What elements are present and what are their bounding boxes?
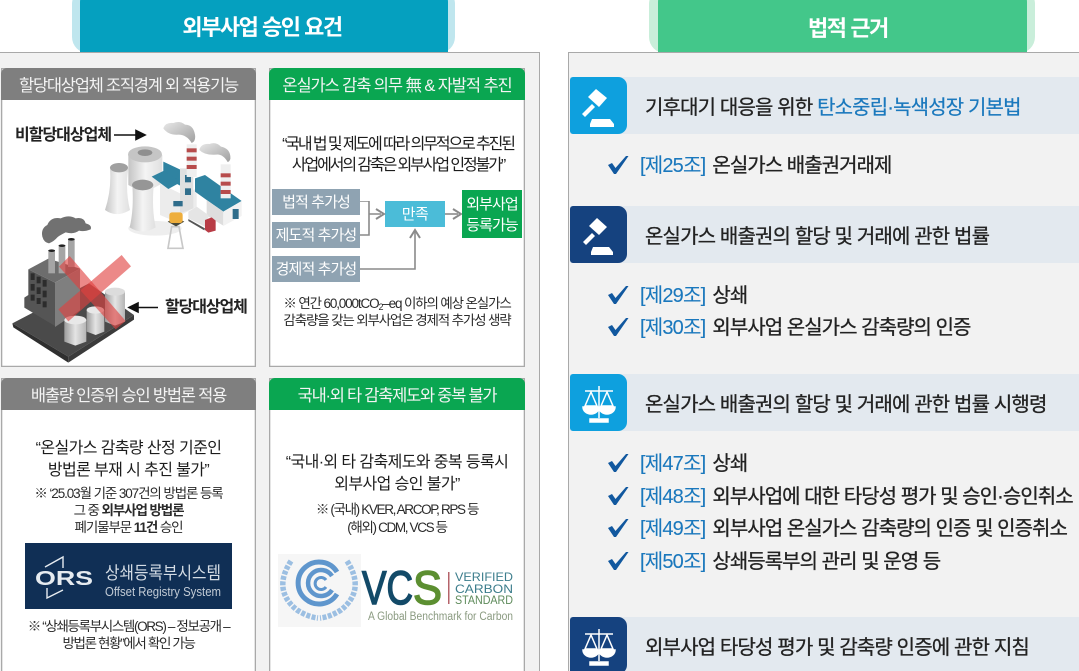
article 25: [제25조] 온실가스 배출권거래제 xyxy=(640,155,891,177)
quote xyxy=(282,136,514,174)
footnote: 감축량을 갖는 외부사업은 경제적 추가성 생략 xyxy=(283,313,511,328)
note: ※ (국내) KVER, ARCOP, RPS 등 xyxy=(316,502,478,517)
quote: “국내 법 및 제도에 따라 의무적으로 추진된 xyxy=(282,136,514,153)
flow box: 외부사업 등록가능: 등록가능 xyxy=(466,217,518,234)
article 29: [제29조] 상쇄 xyxy=(640,285,747,307)
card heading: 온실가스 감축 의무 無 & 자발적 추진 xyxy=(282,77,512,95)
building xyxy=(160,183,197,220)
card: 온실가스 감축 의무 無 & 자발적 추진 xyxy=(269,68,525,367)
footnote: ※ 연간 60,000tCO2–eq 이하의 예상 온실가스 xyxy=(283,296,511,312)
card heading xyxy=(1,378,256,410)
tab title: 법적 근거 xyxy=(808,16,888,41)
quote: “온실가스 감축량 산정 기준인 xyxy=(36,440,221,457)
law title: 외부사업 타당성 평가 및 감축량 인증에 관한 지침 xyxy=(645,636,1029,658)
quote: 사업에서의 감축은 외부사업 인정불가” xyxy=(292,157,504,174)
law title: 기후대기 대응을 위한 탄소중립·녹색성장 기본법 xyxy=(645,96,1021,118)
card heading: 할당대상업체 조직경계 외 적용기능 xyxy=(19,77,238,95)
note: 상쇄등록부시스템: 방법론 현황”에서 확인 가능 xyxy=(62,636,195,651)
tab title xyxy=(80,0,448,53)
panel: 법적 근거 xyxy=(568,52,1079,671)
note: 그 중 외부사업 방법론 xyxy=(74,503,183,518)
note: 폐기물부문 11건 승인 xyxy=(75,520,182,535)
panel: 외부사업 승인 요건 xyxy=(0,52,540,671)
flow box: 외부사업 등록가능: 외부사업 xyxy=(466,196,518,213)
law 4 header xyxy=(570,616,1079,671)
flow box: 법적 추가성 xyxy=(272,189,360,215)
illustration: factories xyxy=(12,122,242,363)
flow box: 만족 xyxy=(385,201,445,227)
logos: UNFCCC and VCS: STANDARD xyxy=(455,595,513,607)
card heading xyxy=(269,68,525,100)
icon: gavel xyxy=(570,206,627,262)
arrows xyxy=(114,130,158,312)
flow box: 경제적 추가성 xyxy=(272,256,360,282)
note xyxy=(316,502,479,535)
logos: UNFCCC and VCS: S xyxy=(413,561,442,614)
tab title xyxy=(658,0,1027,53)
icon: gavel xyxy=(570,76,627,134)
card: 국내·외 타 감축제도와 중복 불가 xyxy=(269,378,525,671)
card heading: 배출량 인증위 승인 방법론 적용 xyxy=(31,387,226,405)
flow box: 만족: 만족 xyxy=(402,206,428,223)
quote xyxy=(36,440,221,478)
flow box: 제도적 추가성 xyxy=(272,222,360,248)
logos: UNFCCC and VCS: CARBON xyxy=(455,584,513,596)
article 48: [제48조] 외부사업에 대한 타당성 평가 및 승인·승인취소 xyxy=(640,486,1073,508)
quote: “국내·외 타 감축제도와 중복 등록시 xyxy=(286,454,508,471)
icon: scales xyxy=(570,616,627,671)
article 49: [제49조] 외부사업 온실가스 감축량의 인증 및 인증취소 xyxy=(640,518,1067,540)
card heading xyxy=(269,378,525,410)
note: ※ ‘25.03월 기준 307건의 방법론 등록 xyxy=(34,486,223,501)
chimneys xyxy=(187,144,197,177)
law title: 온실가스 배출권의 할당 및 거래에 관한 법률 xyxy=(645,226,989,248)
flow box: 외부사업 등록가능 xyxy=(462,190,522,238)
truck xyxy=(188,207,208,228)
note: (해외) CDM, VCS 등 xyxy=(347,520,447,534)
article 30: [제30조] 외부사업 온실가스 감축량의 인증 xyxy=(640,317,970,339)
law title: 온실가스 배출권의 할당 및 거래에 관한 법률 시행령 xyxy=(645,394,1046,416)
tab: 외부사업 승인 요건 xyxy=(72,0,455,53)
quote: 방법론 부재 시 추진 불가” xyxy=(48,462,209,478)
note xyxy=(34,486,223,535)
flow arrows xyxy=(360,201,462,270)
law 2 header xyxy=(570,206,1079,262)
icon: scales xyxy=(570,374,627,430)
logos: UNFCCC and VCS: VERIFIED xyxy=(455,572,513,584)
card heading xyxy=(1,68,256,100)
article 50: [제50조] 상쇄등록부의 관리 및 운영 등 xyxy=(640,551,940,573)
quote xyxy=(286,454,508,492)
flow box: 법적 추가성: 법적 추가성 xyxy=(282,194,350,211)
note: 상쇄등록부시스템 xyxy=(28,619,231,651)
law 1 header xyxy=(570,76,1079,134)
card: 할당대상업체 조직경계 외 적용기능 xyxy=(1,68,256,367)
article 47: [제47조] 상쇄 xyxy=(640,453,747,475)
logos: UNFCCC and VCS: VC xyxy=(362,561,413,614)
law 3 header xyxy=(570,374,1079,430)
flow box: 제도적 추가성: 제도적 추가성 xyxy=(276,227,356,244)
logo: ORS xyxy=(25,543,232,609)
quote: 외부사업 승인 불가” xyxy=(334,476,460,492)
note: 상쇄등록부시스템: ※ “상쇄등록부시스템(ORS) – 정보공개 – xyxy=(28,619,229,634)
footnote xyxy=(283,296,512,328)
tab title: 외부사업 승인 요건 xyxy=(182,15,342,40)
tab: 법적 근거 xyxy=(649,0,1035,53)
label: 비할당대상업체: 비할당대상업체 xyxy=(15,127,111,144)
card: 배출량 인증위 승인 방법론 적용 xyxy=(1,378,256,671)
label: 할당대상업체: 할당대상업체 xyxy=(165,299,247,316)
flow box: 경제적 추가성: 경제적 추가성 xyxy=(276,261,356,278)
logos: UNFCCC and VCS xyxy=(278,554,513,627)
card heading: 국내·외 타 감축제도와 중복 불가 xyxy=(298,387,496,405)
logo: ORS: 상쇄등록부시스템 xyxy=(105,563,221,583)
water tower xyxy=(168,227,183,248)
logo: ORS: ORS xyxy=(35,568,93,590)
